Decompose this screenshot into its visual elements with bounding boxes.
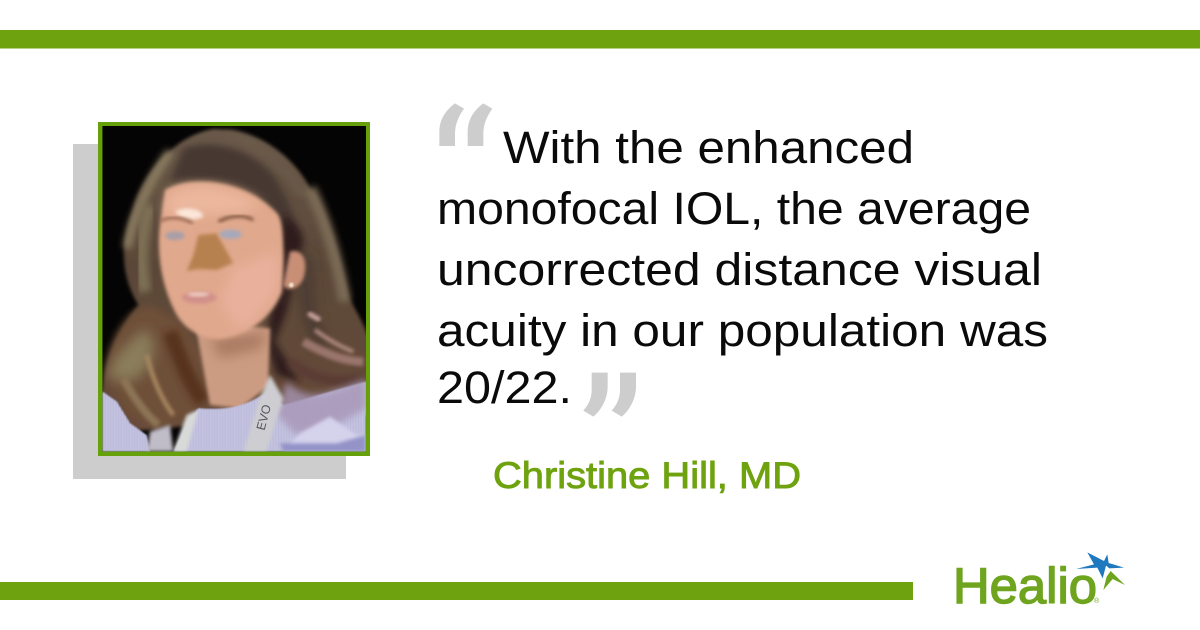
quote text: 20/22. — [437, 362, 572, 413]
registered mark: ® — [1094, 597, 1100, 605]
top green bar — [0, 30, 1200, 48]
logo wordmark: Healio — [953, 558, 1097, 614]
photo drop shadow panel — [73, 144, 346, 479]
quote text: acuity in our population was — [437, 305, 1048, 356]
logo star icon — [1076, 552, 1125, 590]
quote text — [437, 122, 1048, 413]
bottom green bar — [0, 582, 913, 600]
photo frame — [98, 122, 370, 456]
quote text: monofocal IOL, the average — [437, 183, 1031, 234]
Healio logo — [953, 552, 1125, 614]
quote text: uncorrected distance visual — [437, 244, 1042, 295]
portrait photo — [98, 122, 372, 456]
lanyard text: EVO — [254, 403, 274, 432]
closing quotation mark — [583, 373, 636, 417]
attribution name: Christine Hill, MD — [493, 455, 801, 496]
opening quotation mark — [439, 103, 492, 146]
quote text: With the enhanced — [503, 122, 914, 173]
portrait image — [102, 126, 372, 452]
